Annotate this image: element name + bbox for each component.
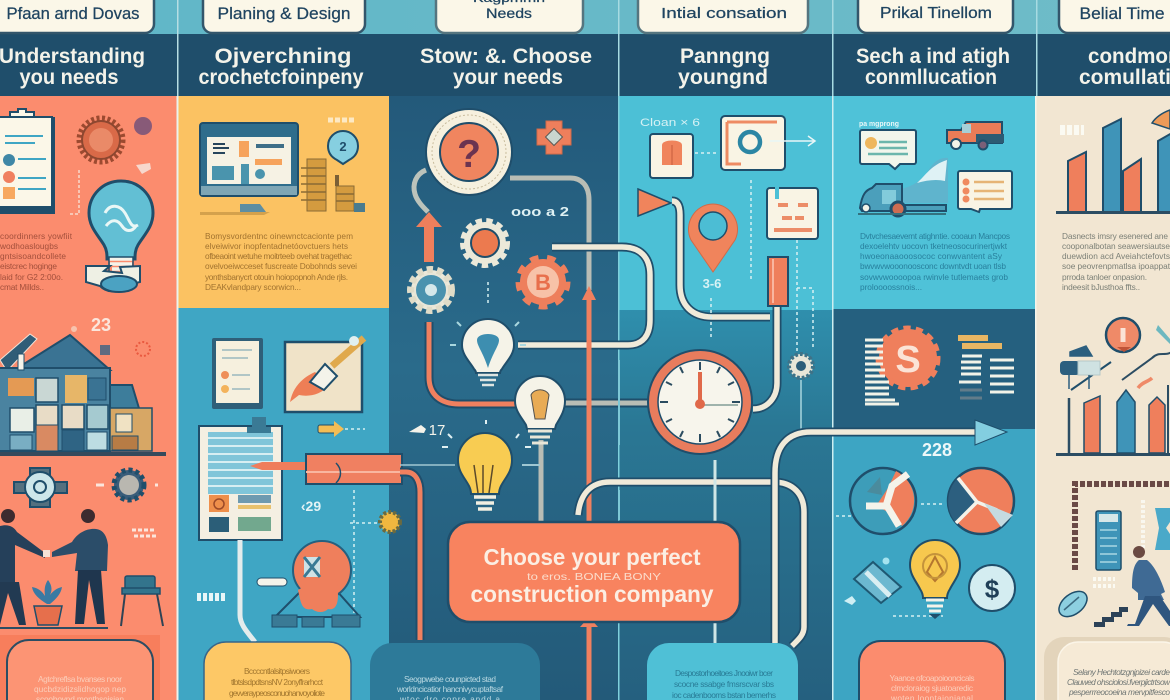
icon: drawing board with brush (285, 336, 364, 412)
icon: pie circle left (850, 468, 916, 534)
label: 17 (409, 422, 445, 439)
icon: location pin: 2 (339, 139, 347, 154)
icon: small marks (0, 326, 150, 371)
icon: document on clipboard (199, 417, 282, 540)
icon: bubble left (860, 130, 916, 169)
illustration: handshake (0, 509, 108, 625)
icon: small checklist clipboard (212, 338, 263, 409)
icon: computer monitor (200, 123, 298, 215)
text block: column 5 body: Dvtvchesaevemt atighntie. cooaun Mancpos (860, 231, 1010, 241)
icon: puzzle badge (537, 121, 571, 154)
tab: Needs (436, 0, 583, 33)
text block: column 5 body: hwoeonaaooosococ conwvantent aSy (860, 251, 1003, 261)
card: centre-right bottom (647, 643, 798, 700)
icon: bulb blue (450, 319, 526, 385)
heading: condmor comullati (1079, 45, 1170, 89)
card: column 6 bottom: Selany Hechtotzgnjpizei carde (1073, 667, 1170, 677)
text block: column 1 body: laid for G2 2:00o. (0, 272, 63, 282)
illustration: house (0, 335, 166, 456)
panel: centre flowchart (370, 109, 804, 700)
heading: Stow & Choose your needs (420, 45, 592, 89)
icon: coral gear: B (535, 270, 551, 295)
card: column 1 bottom: Agtchreflsa bvanses noor (38, 674, 122, 684)
card: column 5 bottom: clmcloraiog sjuatoaredic (891, 683, 973, 693)
card: column 1 bottom (0, 635, 160, 700)
heading: Ojverchning crochetcfoinpeny: Ojverchning (214, 45, 352, 68)
icon: magnifier and pen (1071, 318, 1170, 390)
card: column 2 bottom: Bccccntlalsitpsiwoers (244, 666, 310, 676)
chart: top bar chart (1056, 110, 1170, 214)
card: column 6 bottom: pesperrreocoeina mervpitfesco (1068, 687, 1170, 697)
icon: arrow head (975, 420, 1007, 445)
icon: question mark circle with loop: ? (457, 133, 481, 176)
label: 17: 17 (429, 422, 445, 439)
heading: Ojverchning crochetcfoinpeny (198, 45, 364, 89)
text block: column 2 body: ovelvoeiwcceset fuscreate Dobohnds sevei (205, 261, 357, 271)
heading: Panngng youngnd (678, 45, 770, 89)
text block: column 6 body: prroda tanloer onpasion. (1062, 272, 1147, 282)
card: centre-right bottom: Despostorhoeitoes Jnooiwr bcer (675, 668, 773, 678)
tab: Planing & Design (203, 0, 365, 33)
text block: column 6 body: soe peovrenpmatlsa ipoappat (1062, 261, 1170, 271)
connector: white stem (240, 540, 255, 642)
icon: dots (132, 530, 156, 536)
icon: stacks of blocks (301, 159, 365, 212)
icon: coral dollar gear (879, 329, 937, 387)
icon: note with blocks (767, 187, 818, 239)
icon: gear orange core (464, 222, 506, 264)
panel: column 6 illustrations (1044, 110, 1170, 700)
panel: column 2 illustrations (197, 120, 402, 642)
panel: column 4 illustrations (638, 116, 1007, 643)
text block: column 2 body: ofbeaoint wetuhe moitrteeb ovehat tragethac (205, 251, 352, 261)
card: column 2 bottom: tlbtslsdpdtsnsNV 2onyffrarhcct (231, 677, 324, 687)
card: centre-left bottom: worldncicatior hancnivycuptaftsaf (396, 684, 504, 694)
label: 29: ‹29 (301, 498, 321, 514)
icon: light bulb (69, 170, 153, 292)
connector: flag pipe inner (672, 201, 770, 317)
card: column 6 bottom: Clauwed ohsciolosi.fverpjictrtsow (1067, 677, 1170, 687)
text block: column 6 body: cooponalbotan seawersiautse (1062, 241, 1170, 251)
text block: column 1 body: cmat Millds.. (0, 282, 44, 292)
icon: bulb cream with flame (515, 376, 565, 443)
tab: Prikal Tinellom (858, 0, 1013, 33)
icon: orange blob with triangle (257, 541, 360, 627)
icon: gear left (411, 270, 451, 310)
card: column 5 bottom (859, 641, 1005, 700)
icon: up arrow (416, 212, 442, 262)
connector: dotted line (350, 490, 378, 625)
icon: coral gear (520, 259, 566, 305)
tab: Belial Time: Belial Time (1080, 4, 1164, 23)
icon: pie circle right (948, 468, 1014, 534)
chart: lower bar chart (1056, 385, 1170, 456)
heading: Panngng youngnd: youngnd (678, 66, 768, 89)
icon: flame dash (1138, 378, 1152, 388)
panel: column 5 illustrations (836, 121, 1015, 700)
chart: stacked lines right (958, 335, 1014, 398)
card: column 2 bottom (204, 642, 351, 700)
text block: column 6 body (1062, 231, 1170, 292)
card: centre-left bottom (370, 643, 540, 700)
icon: flag (638, 189, 671, 216)
icon: clipboard checklist (0, 109, 55, 214)
banner: choose your perfect construction company: construction company (470, 581, 714, 607)
tab: Prain and Dovas (0, 0, 154, 33)
text block: column 1 body: coordinners yowfiit (0, 231, 73, 241)
connector: vertical white (714, 460, 716, 644)
label: squiggle (197, 593, 227, 601)
tab: Needs: Needs (486, 5, 532, 21)
icon: yellow arrow (318, 421, 365, 437)
heading: Stow & Choose your needs: Stow: &. Choose (420, 45, 592, 68)
icon: big note with ring (721, 116, 815, 170)
text block: column 6 body: Dasnects imsry esenered ane (1062, 231, 1168, 241)
icon: dollar coin: $ (985, 574, 1000, 604)
icon: coral dollar gear: S (895, 339, 921, 381)
text block: column 1 body: eistcrec hoginge (0, 261, 57, 271)
icon: small note card (650, 134, 717, 178)
card: centre-right bottom: scocne ssabge fmsrscvar sbs (674, 679, 774, 689)
heading: Understanding you needs: you needs (20, 66, 118, 89)
icon: bubble right (958, 171, 1012, 212)
card: column 2 bottom: gevveraypeosconuohanvoyoliote (229, 688, 325, 698)
banner: choose your perfect construction company: to eros. BONEA BONY (527, 572, 661, 583)
card: column 5 bottom: Yaance ofcoapoiooncicals (890, 673, 974, 683)
label: 228: 228 (922, 440, 952, 460)
label: 23: 23 (91, 315, 111, 335)
icon: yellow bulb (442, 420, 531, 509)
icon: chair (121, 576, 163, 626)
card: column 6 bottom (1044, 637, 1170, 700)
banner: choose your perfect construction company: Choose your perfect (484, 544, 701, 570)
icon: location pin (688, 204, 738, 272)
text block: column 5 body: bwvwvwooonoosconc downtvdt uoan tlsb (860, 261, 1006, 271)
icon: large truck (858, 158, 948, 216)
text block: column 5 body (860, 231, 1010, 292)
icon: dollar coin (969, 565, 1015, 611)
icon: camera (1060, 346, 1100, 389)
icon: location pin (328, 131, 358, 164)
text block: column 2 body: elveiwivor inopfentadnetóovctuers hets (205, 241, 348, 251)
icon: potted plant (32, 580, 62, 625)
label: 3-6: 3-6 (703, 276, 721, 291)
text block: column 1 body (0, 231, 73, 292)
heading: Sech a ind atigh conmllucation (856, 45, 1010, 89)
connector: dotted (487, 282, 489, 306)
text block: column 6 body: duewdion acd Aveiahctefovts (1062, 251, 1170, 261)
connector: dashed guides (711, 180, 813, 360)
tab: Planing & Design: Planing & Design (218, 4, 350, 23)
connector: upper cream line into banner (578, 482, 804, 646)
icon: cross gear (14, 468, 67, 507)
text block: column 6 body: indeesit bJusthoa ffts.. (1062, 282, 1140, 292)
icon: small truck (947, 122, 1004, 150)
icon: pen (250, 454, 402, 484)
icon: small gauge (789, 354, 813, 430)
text block: column 2 body: DEAKvlandpary scorwicn... (205, 282, 301, 292)
heading: Sech a ind atigh conmllucation: conmllucation (865, 66, 997, 89)
tab: Intial consation (638, 0, 808, 33)
tab: Prikal Tinellom: Prikal Tinellom (880, 5, 992, 22)
text block: column 2 body (205, 231, 357, 292)
icon: solar panel (844, 558, 901, 605)
banner: choose your perfect construction company (448, 522, 740, 622)
chart: line squiggle (1122, 350, 1170, 380)
text block: column 2 body: Bomysvordentnc oinewnctcacionte pem (205, 231, 353, 241)
icon: clock (648, 350, 752, 454)
tab: Prain and Dovas: Pfaan arnd Dovas (6, 4, 140, 23)
tab: Belial Time (1059, 0, 1170, 33)
icon: paperclip (1054, 586, 1092, 622)
connector: lower arrow pipe (775, 432, 979, 643)
connector pipes (400, 178, 652, 700)
heading: Ojverchning crochetcfoinpeny: crochetcfoinpeny (198, 66, 364, 89)
panel: top strip and header band (0, 0, 1170, 96)
icon: stairs (1085, 607, 1128, 627)
text block: column 2 body: yonthsbanycrt otouin hoiopopnoh Ande rjls. (205, 272, 348, 282)
text block: column 5 body: sovwvwoooopoa rwinvle tutlemaets grob (860, 272, 1008, 282)
card: centre-left bottom: Seogpwebe counpicted stad (404, 674, 496, 684)
icon: idea bulb (910, 540, 960, 619)
label: faint (328, 118, 356, 122)
text block: column 1 body: gntsisoandcollete (0, 251, 66, 261)
heading: condmor comullati: comullati (1079, 66, 1170, 89)
icon: question mark circle with loop (414, 109, 512, 212)
chart: stacked lines left (865, 340, 899, 404)
ground (0, 627, 108, 629)
icon: frame with calculator (1075, 484, 1170, 586)
icon: gear badge (79, 117, 152, 174)
icon: coral cylinder with pipe (753, 257, 788, 409)
label: number 2: ooo a 2 (511, 204, 569, 219)
connector: upper cream line into banner inner (578, 482, 804, 646)
heading: Sech a ind atigh conmllucation: Sech a ind atigh (856, 45, 1010, 68)
heading: Stow & Choose your needs: your needs (453, 66, 563, 89)
tab: Intial consation: Intial consation (661, 5, 787, 22)
card: column 1 bottom: qucbdzidizslidhogop nep (34, 684, 126, 694)
text block: column 5 body: dexoelehtv uocovn tketneosocurinertjwkt (860, 241, 1008, 251)
connector: dashes (836, 504, 943, 616)
icon: round gear (96, 470, 158, 500)
label: clean 6: Cloan × 6 (640, 117, 700, 129)
text block: column 1 body: wodhoaslougbs (0, 241, 58, 251)
label: small: pa mgprong (859, 121, 899, 128)
card: centre-right bottom: ioc cadenbooms bstan bemerhs (672, 690, 776, 700)
text block: column 5 body: proloooossnois... (860, 282, 922, 292)
connector: flag pipe (672, 201, 770, 317)
icon: gold gear (380, 512, 400, 532)
heading: Understanding you needs (0, 45, 145, 89)
connector: lower arrow pipe inner (775, 432, 979, 643)
panel: column 1 illustrations (0, 109, 166, 629)
heading: Understanding you needs: Understanding (0, 45, 145, 68)
illustration: man walking (1127, 546, 1170, 626)
heading: Panngng youngnd: Panngng (680, 45, 770, 68)
